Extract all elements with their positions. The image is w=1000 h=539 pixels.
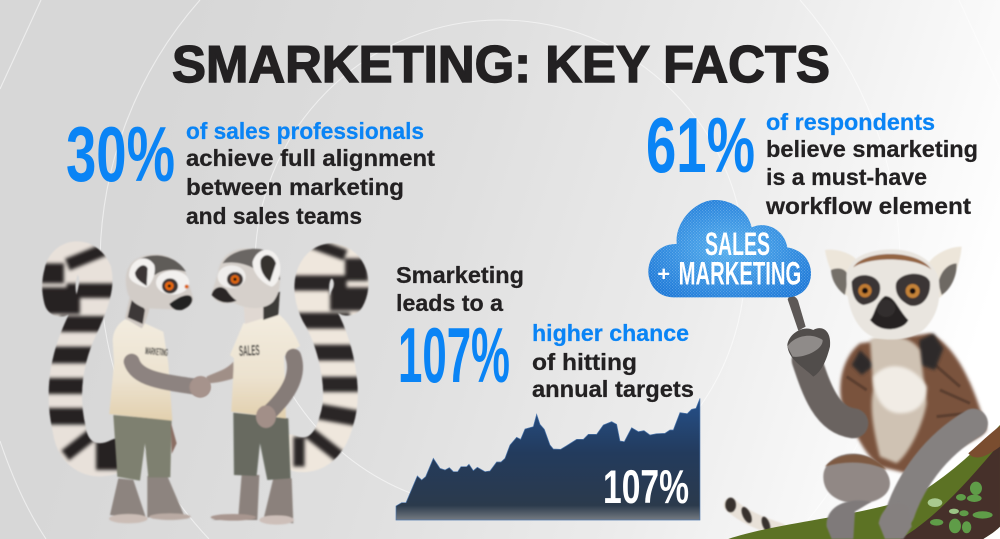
cloud label: MARKETING <box>679 255 801 291</box>
cloud label <box>657 226 801 291</box>
stat text: of sales professionals <box>186 118 424 144</box>
stat text: believe smarketing <box>766 136 978 162</box>
intro text <box>396 262 524 316</box>
illustration: two lemurs shaking hands <box>41 242 370 525</box>
stat text: achieve full alignment <box>186 145 435 171</box>
lemur head <box>825 247 962 340</box>
left lemur: MARKETING <box>145 346 168 359</box>
branch <box>728 425 1000 539</box>
stat text: of hitting <box>532 349 637 375</box>
stat text: of respondents <box>766 109 935 135</box>
stat text: and sales teams <box>186 203 362 229</box>
cloud label: + <box>657 264 670 286</box>
stat text <box>765 109 978 219</box>
stat number 30%: 30% <box>66 110 175 198</box>
illustration: lemur pointing at cloud <box>725 247 1000 539</box>
stat text: annual targets <box>532 376 694 402</box>
chart label: 107% <box>603 460 689 513</box>
cloud label: SALES <box>705 226 770 262</box>
left lemur <box>109 254 211 523</box>
icon: sales + marketing cloud <box>648 200 811 297</box>
left tail <box>41 242 118 476</box>
stat text: workflow element <box>765 193 971 219</box>
intro text: leads to a <box>396 290 503 316</box>
lemur limbs on branch <box>827 423 973 539</box>
small tail <box>725 498 780 533</box>
stat number 107%: 107% <box>398 311 510 399</box>
leaves <box>928 482 993 533</box>
stat text: is a must-have <box>766 164 927 190</box>
stat text <box>532 320 694 402</box>
stat: 30% of sales professionals <box>66 110 435 229</box>
right tail <box>289 242 370 472</box>
intro text: Smarketing <box>396 262 524 288</box>
right lemur <box>191 248 300 525</box>
stat: 61% of respondents <box>646 101 978 219</box>
title: SMARKETING: KEY FACTS <box>172 36 830 94</box>
lemur body <box>823 333 987 504</box>
stat text <box>186 118 435 229</box>
area chart <box>396 398 700 520</box>
stat number 61%: 61% <box>646 101 755 189</box>
stat: 107% higher chance <box>396 262 694 402</box>
pointing arm <box>787 296 853 423</box>
right lemur: SALES <box>239 343 260 360</box>
stat text: between marketing <box>186 174 404 200</box>
stat text: higher chance <box>532 320 689 346</box>
